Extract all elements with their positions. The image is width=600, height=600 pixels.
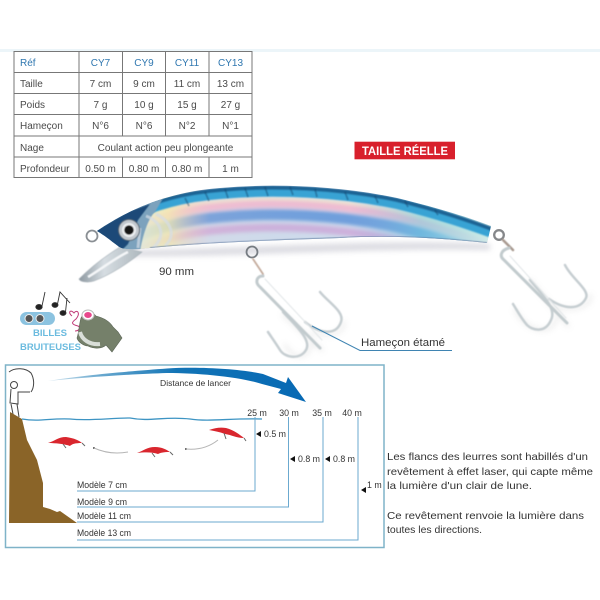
cast line 2	[185, 440, 218, 450]
depth labels	[256, 429, 382, 493]
depth labels: 0.8 m	[333, 454, 355, 464]
table row: Hameçon: N°2	[179, 121, 196, 132]
lure eye	[118, 220, 140, 240]
text: billes bruiteuses: BILLES	[33, 328, 67, 338]
model labels: Modèle 9 cm	[77, 497, 127, 507]
table row: Taille: 13 cm	[217, 79, 244, 90]
lure shadow	[120, 242, 490, 256]
rear ring	[494, 230, 504, 240]
table row: Profondeur: 1 m	[222, 164, 239, 175]
music notes	[36, 292, 70, 315]
cliff	[9, 412, 77, 523]
distance labels	[247, 408, 362, 418]
angler	[9, 369, 34, 417]
table row: Taille: Taille	[20, 79, 43, 90]
arrow: distance	[48, 368, 306, 402]
description text: toutes les directions.	[387, 525, 482, 536]
rattle balls	[25, 314, 44, 322]
table row: Réf	[20, 58, 243, 69]
table row: Réf: CY13	[218, 58, 243, 69]
table row: Profondeur: Profondeur	[20, 164, 70, 175]
label: distance de lancer: Distance de lancer	[160, 378, 231, 388]
squiggle heart	[70, 311, 80, 331]
model labels	[77, 480, 131, 538]
table row: Profondeur: 0.80 m	[172, 164, 202, 175]
description text	[387, 452, 593, 536]
model lines	[77, 417, 358, 540]
top tinted strip	[0, 49, 600, 52]
distance labels: 25 m	[247, 408, 267, 418]
lure back markings	[185, 187, 438, 215]
lure bib	[79, 247, 142, 282]
table row: Nage	[20, 143, 234, 154]
distance labels: 35 m	[312, 408, 332, 418]
depth labels: 1 m	[367, 480, 382, 490]
depth labels: 0.5 m	[264, 429, 286, 439]
distance labels: 30 m	[279, 408, 299, 418]
front treble hook	[253, 259, 344, 357]
table row: Hameçon: Hameçon	[20, 121, 63, 132]
lure head	[97, 198, 164, 250]
table row: Profondeur: 0.80 m	[129, 164, 159, 175]
lure bib highlight	[88, 252, 128, 277]
table row: Profondeur: 0.50 m	[85, 164, 116, 175]
panel: casting diagram	[6, 365, 384, 548]
table row: Poids: 27 g	[221, 100, 240, 111]
callout: hameçon étamé: Hameçon étamé	[361, 337, 445, 349]
description text: revêtement à effet laser, qui capte même	[387, 467, 593, 478]
model labels: Modèle 7 cm	[77, 480, 127, 490]
description text: Les flancs des leurres sont habillés d'un	[387, 452, 588, 463]
table row: Poids	[20, 100, 240, 111]
table row: Réf: CY7	[91, 58, 111, 69]
icon: billes bruiteuses	[20, 292, 122, 352]
table row: Hameçon: N°1	[222, 121, 239, 132]
table row: Hameçon: N°6	[136, 121, 153, 132]
table row: Taille: 9 cm	[133, 79, 155, 90]
red lure 3	[209, 428, 246, 441]
badge: taille réelle: TAILLE RÉELLE	[362, 145, 448, 158]
lure illustration	[78, 186, 505, 283]
rattle capsule	[20, 312, 55, 325]
lure nose ring	[86, 230, 98, 242]
lure underside edge	[150, 237, 487, 248]
water line	[22, 418, 262, 420]
specification table	[14, 52, 252, 178]
depth labels: 0.8 m	[298, 454, 320, 464]
table row: Taille: 11 cm	[174, 79, 200, 90]
belly ring	[246, 246, 258, 258]
red lure 1	[48, 437, 85, 448]
table row: Réf: Réf	[20, 58, 36, 69]
description text: la lumière d'un clair de lune.	[387, 481, 532, 492]
model labels: Modèle 11 cm	[77, 511, 131, 521]
table row: Réf: CY9	[134, 58, 154, 69]
lure gill	[138, 214, 171, 248]
callout: hameçon étamé	[312, 326, 452, 350]
table row: Taille	[20, 79, 244, 90]
fish	[77, 312, 122, 352]
model labels: Modèle 13 cm	[77, 528, 131, 538]
table row: Profondeur	[20, 164, 239, 175]
distance labels: 40 m	[342, 408, 362, 418]
fish eye	[82, 310, 94, 320]
red lure 2	[137, 447, 173, 457]
table row: Poids: 7 g	[94, 100, 107, 111]
rear treble hook	[501, 240, 591, 330]
lure body	[97, 186, 491, 250]
description text: Ce revêtement renvoie la lumière dans	[387, 511, 584, 522]
fish belly highlight	[80, 332, 100, 344]
table row: Poids: Poids	[20, 100, 45, 111]
cast line 1	[93, 447, 128, 453]
table row: Réf: CY11	[175, 58, 200, 69]
table row: Hameçon	[20, 121, 239, 132]
table row: Hameçon: N°6	[92, 121, 109, 132]
table row: Taille: 7 cm	[90, 79, 111, 90]
table row: Poids: 15 g	[177, 100, 197, 111]
table row: Nage: Nage	[20, 143, 44, 154]
icon: billes bruiteuses: BRUITEUSES	[20, 342, 81, 352]
badge: taille réelle	[354, 142, 455, 159]
table row: Nage: Coulant action peu plongeante	[98, 143, 234, 154]
table row: Poids: 10 g	[134, 100, 154, 111]
label: 90 mm: 90 mm	[159, 266, 194, 278]
